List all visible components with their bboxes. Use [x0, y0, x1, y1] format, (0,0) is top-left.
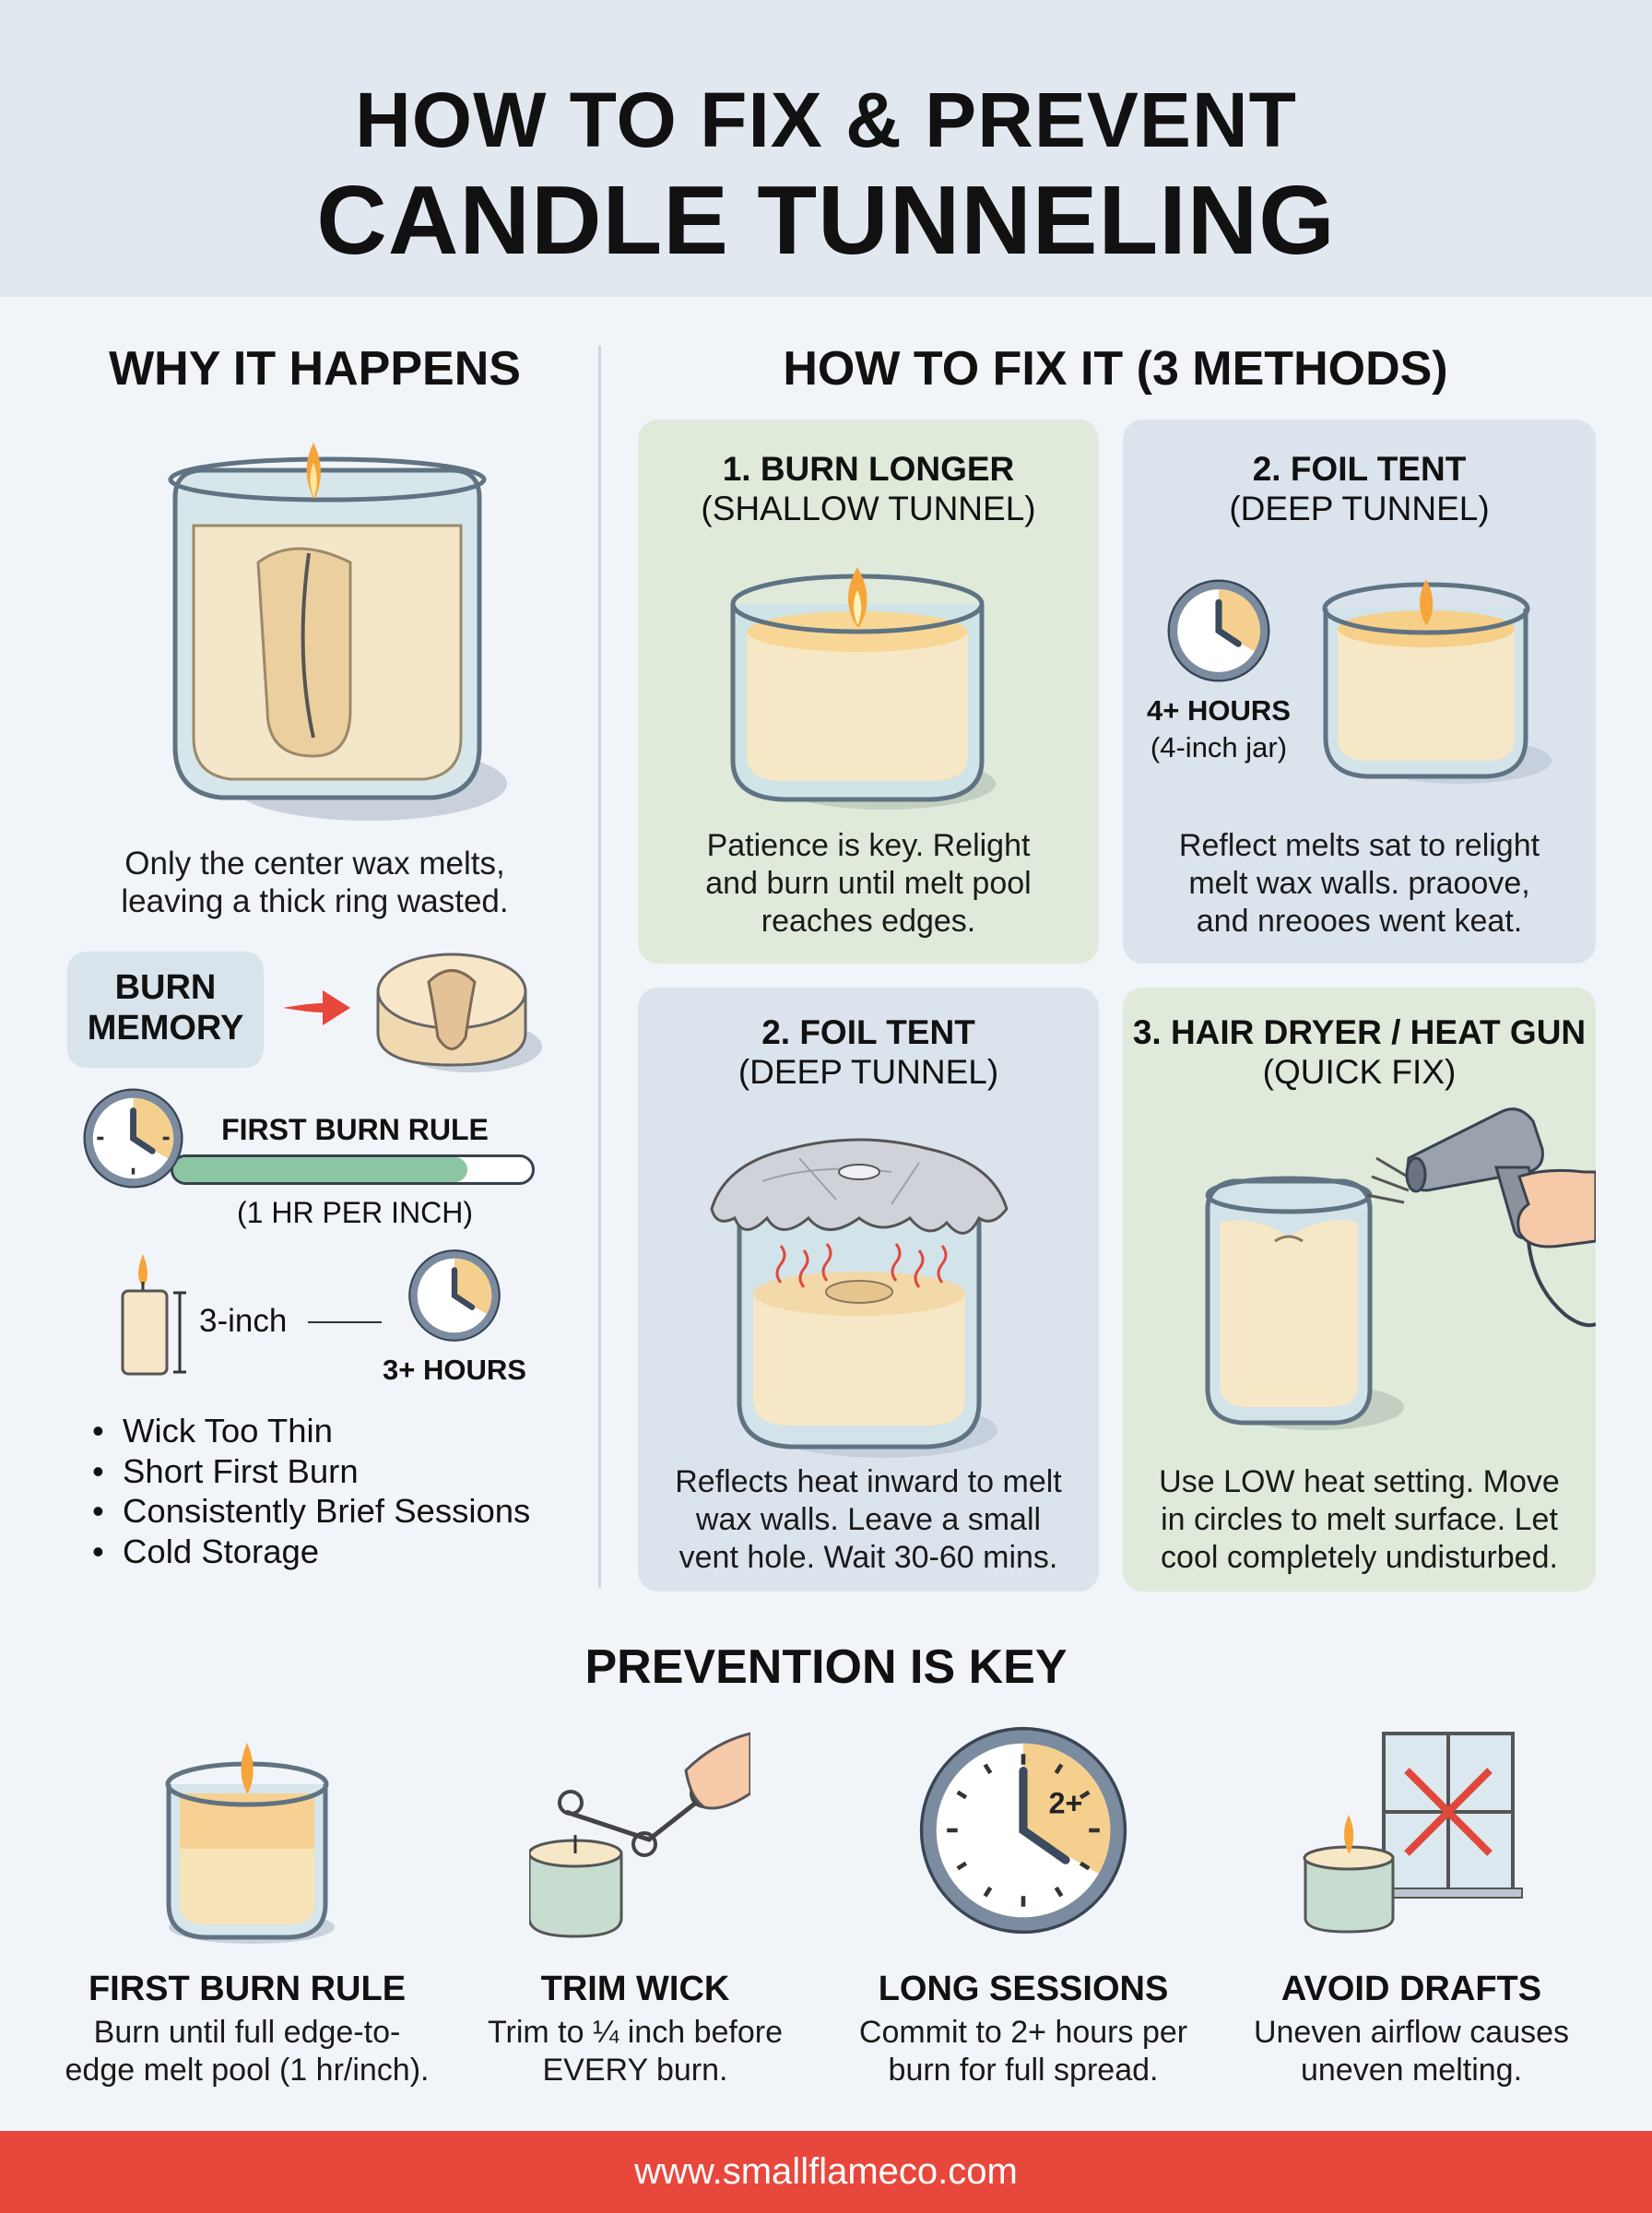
- heading: how to fix: HOW TO FIX IT (3 METHODS): [783, 342, 1448, 396]
- label: 4+ hours: [1147, 694, 1291, 763]
- bullet list: causes: • Cold Storage: [92, 1533, 319, 1569]
- card heading: 2. FOIL TENT: [1253, 450, 1466, 488]
- description: wax walls. Leave a small: [696, 1502, 1041, 1537]
- description: Reflects heat inward to melt: [675, 1464, 1062, 1499]
- description: vent hole. Wait 30-60 mins.: [679, 1540, 1057, 1575]
- description: [859, 2015, 1187, 2088]
- title: TRIM WICK: [541, 1970, 729, 2008]
- illustration: foil covered jar: [710, 1138, 1009, 1458]
- description: and nreooes went keat.: [1197, 904, 1522, 939]
- clock icon: [1167, 579, 1270, 682]
- description: [488, 2015, 783, 2088]
- description: in circles to melt surface. Let: [1161, 1502, 1558, 1537]
- title: HOW TO FIX & PREVENT: [355, 77, 1297, 163]
- header band: [0, 0, 1652, 297]
- description: edge melt pool (1 hr/inch).: [65, 2053, 429, 2088]
- title: LONG SESSIONS: [879, 1970, 1168, 2008]
- description: reaches edges.: [761, 904, 975, 939]
- icon: clock 2+: [920, 1726, 1127, 1935]
- burn memory box: BURN: [115, 968, 216, 1007]
- description: Reflect melts sat to relight: [1179, 828, 1540, 863]
- panel: foil tent top: [1123, 420, 1596, 964]
- caption: center melts: leaving a thick ring wasted.: [121, 883, 509, 919]
- icon: small pillar candle: [122, 1254, 186, 1376]
- description: Uneven airflow causes: [1254, 2015, 1569, 2050]
- description: Commit to 2+ hours per: [859, 2015, 1187, 2050]
- description: [1159, 1464, 1560, 1575]
- card heading: [701, 450, 1036, 527]
- first burn rule progress: [83, 1088, 535, 1229]
- title: FIRST BURN RULE: [88, 1970, 406, 2008]
- burn memory box: [67, 952, 264, 1068]
- description: and burn until melt pool: [705, 866, 1032, 901]
- card heading: (DEEP TUNNEL): [738, 1053, 998, 1091]
- description: [1179, 828, 1540, 939]
- description: Use LOW heat setting. Move: [1159, 1464, 1560, 1499]
- icon: window with candle: [1304, 1732, 1523, 1933]
- card heading: [738, 1013, 998, 1091]
- title: AVOID DRAFTS: [1281, 1970, 1541, 2008]
- illustration: jar and hair dryer: [1205, 1107, 1596, 1430]
- card heading: 3. HAIR DRYER / HEAT GUN: [1133, 1013, 1586, 1051]
- illustration: candle jar: [730, 567, 996, 810]
- label: 3+ hours: 3+ HOURS: [383, 1354, 526, 1386]
- footer band: [0, 2131, 1652, 2213]
- tip: first burn rule: [65, 1743, 429, 2088]
- caption: center melts: [121, 846, 509, 919]
- description: [675, 1464, 1062, 1575]
- card heading: [1133, 1013, 1586, 1091]
- panel: burn longer: [638, 420, 1099, 964]
- panel: hair dryer: [1123, 988, 1596, 1592]
- description: burn for full spread.: [889, 2053, 1158, 2088]
- description: [705, 828, 1032, 939]
- illustration: tunneled jar candle: [168, 443, 507, 821]
- description: Burn until full edge-to-: [94, 2015, 400, 2050]
- description: Patience is key. Relight: [707, 828, 1030, 863]
- label: 1 hr per inch: (1 HR PER INCH): [237, 1196, 473, 1229]
- title: CANDLE TUNNELING: [316, 166, 1336, 275]
- clock icon: [83, 1088, 183, 1188]
- arrow: red: [283, 990, 350, 1025]
- label: 3-inch: 3-inch: [199, 1303, 287, 1339]
- tip: avoid drafts: [1254, 1732, 1569, 2088]
- bullet list: causes: [92, 1412, 530, 1569]
- footer band: www.smallflameco.com: [634, 2151, 1018, 2192]
- icon: wick trimmer: [529, 1732, 750, 1938]
- description: [1254, 2015, 1569, 2088]
- description: EVERY burn.: [542, 2053, 727, 2088]
- description: [65, 2015, 429, 2088]
- card heading: 2. FOIL TENT: [761, 1013, 975, 1051]
- icon: tunneled wax disc: [376, 953, 542, 1072]
- label: first burn rule: FIRST BURN RULE: [221, 1113, 489, 1146]
- card heading: 1. BURN LONGER: [723, 450, 1014, 488]
- description: cool completely undisturbed.: [1161, 1540, 1558, 1575]
- heading: prevention: PREVENTION IS KEY: [584, 1640, 1068, 1694]
- caption: center melts: Only the center wax melts,: [124, 846, 505, 882]
- bullet list: causes: • Short First Burn: [92, 1451, 359, 1490]
- progress bar: [171, 1154, 535, 1185]
- title: [316, 77, 1336, 275]
- heading: why it happens: WHY IT HAPPENS: [109, 342, 521, 396]
- description: uneven melting.: [1301, 2053, 1522, 2088]
- card heading: (SHALLOW TUNNEL): [701, 490, 1036, 527]
- burn memory box: MEMORY: [88, 1009, 243, 1047]
- label: 4+ hours: 4+ HOURS: [1147, 694, 1291, 727]
- label: 4+ hours: (4-inch jar): [1150, 731, 1287, 763]
- panel: foil tent: [638, 988, 1099, 1592]
- clock: 3+ hours: [408, 1249, 501, 1342]
- card heading: (QUICK FIX): [1263, 1053, 1456, 1091]
- bullet list: causes: • Consistently Brief Sessions: [92, 1492, 530, 1530]
- illustration: candle jar: [1322, 579, 1552, 784]
- tip: trim wick: [488, 1732, 783, 2088]
- bullet list: causes: • Wick Too Thin: [92, 1412, 333, 1450]
- card heading: (DEEP TUNNEL): [1229, 490, 1490, 527]
- icon: clock 2+: 2+: [1049, 1787, 1082, 1820]
- description: melt wax walls. praoove,: [1188, 866, 1530, 901]
- description: Trim to ¼ inch before: [488, 2015, 783, 2050]
- tip: long sessions: [859, 1726, 1187, 2088]
- icon: candle jar: [166, 1743, 335, 1944]
- card heading: [1229, 450, 1490, 527]
